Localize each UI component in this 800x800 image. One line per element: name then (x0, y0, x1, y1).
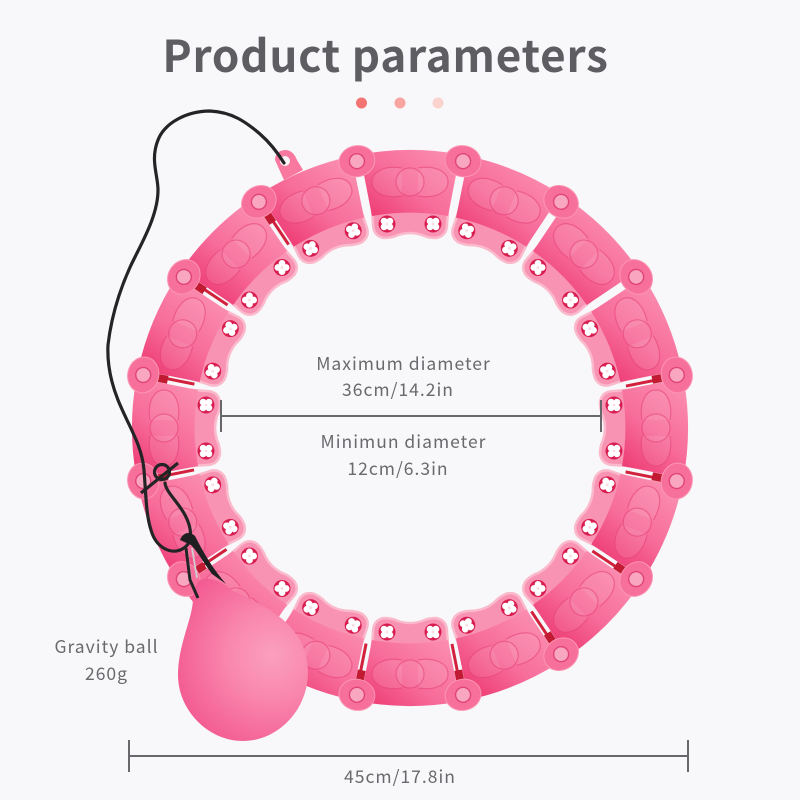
hoop knobs (125, 143, 695, 713)
carabiner clip (180, 533, 226, 598)
hoop segments (132, 150, 688, 706)
minimum diameter value: 12cm/6.3in (347, 456, 449, 481)
black cord (108, 111, 284, 551)
decorative dots row (356, 98, 444, 108)
maximum diameter label: Maximum diameter (316, 351, 491, 376)
maximum diameter value: 36cm/14.2in (342, 377, 454, 402)
gravity ball label: Gravity ball (54, 634, 159, 659)
hula hoop ring (125, 143, 695, 713)
inner diameter measure line (221, 400, 601, 432)
red elastic cords in gaps (153, 210, 667, 685)
minimum diameter label: Minimun diameter (321, 429, 486, 454)
outer width label: 45cm/17.8in (344, 764, 456, 789)
title: Product parameters (162, 21, 609, 85)
gravity ball weight: 260g (85, 661, 128, 686)
outer width measure line (129, 740, 688, 772)
cord loop knot (141, 463, 178, 493)
gravity ball (178, 579, 308, 741)
cord anchor tab (275, 150, 303, 180)
